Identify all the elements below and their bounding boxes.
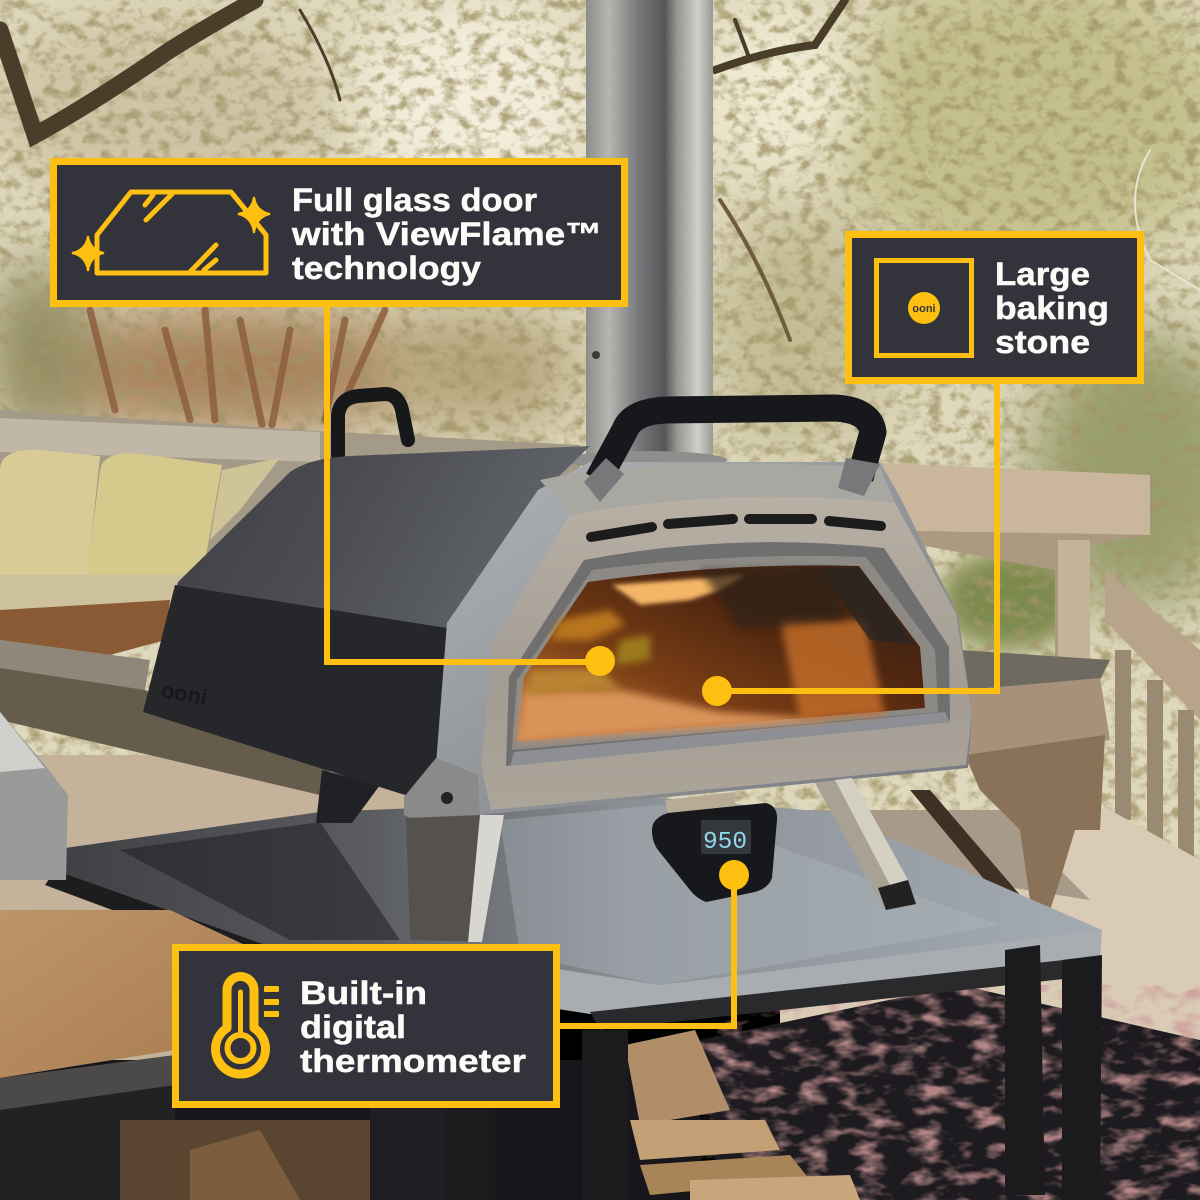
glass door <box>518 565 925 741</box>
leader line: baking stone <box>702 382 997 706</box>
oven body lower <box>143 585 447 795</box>
right leg <box>815 778 916 910</box>
text: full glass door label: with ViewFlame™ <box>291 216 602 252</box>
text: baking stone label <box>995 256 1109 360</box>
probe bracket <box>665 792 735 816</box>
patio floor <box>0 755 1200 1065</box>
bare trunks behind sofa <box>90 310 385 425</box>
rug <box>700 985 1200 1200</box>
wooden board on sofa <box>0 600 170 655</box>
icon: baking stone with ooni logo <box>876 260 972 356</box>
text: full glass door label: technology <box>292 250 481 286</box>
leader line: glass door <box>327 305 615 676</box>
panel: digital thermometer <box>176 948 556 1104</box>
deck railing <box>860 462 1200 860</box>
vents <box>591 519 881 537</box>
left side: second oven <box>0 712 68 880</box>
panel: large baking stone <box>848 234 1140 380</box>
rear handle <box>338 394 408 455</box>
panel: full glass door <box>54 162 624 304</box>
rear leg <box>316 770 380 823</box>
black table understructure <box>0 1060 700 1200</box>
pizza oven <box>143 394 972 942</box>
thermometer unit <box>652 803 777 902</box>
front cast frame <box>481 497 972 810</box>
text: thermometer label: thermometer <box>300 1043 526 1079</box>
oven body upper <box>170 446 590 640</box>
hinge <box>404 758 480 827</box>
firewood logs <box>190 1030 860 1200</box>
background: garden foliage <box>0 0 1200 880</box>
carved side table <box>0 640 1110 910</box>
icon: baking stone with ooni logo: ooni <box>912 303 936 315</box>
ooni mark on body: ooni <box>159 677 209 710</box>
leader line: thermometer <box>558 860 749 1026</box>
text: full glass door label <box>291 182 602 286</box>
sofa with cushions <box>0 410 580 655</box>
tree branches <box>0 0 1200 340</box>
icon: thermometer <box>216 977 279 1074</box>
front leg <box>406 815 504 942</box>
text: thermometer label: Built-in <box>300 975 427 1011</box>
text: full glass door label: Full glass door <box>292 182 537 218</box>
front handle <box>598 408 873 480</box>
text: thermometer label: digital <box>300 1009 406 1045</box>
digital display: 950 <box>703 829 747 856</box>
text: baking stone label: Large <box>995 256 1090 292</box>
steel table <box>45 798 1102 1030</box>
left side: wooden serving board <box>0 910 245 1110</box>
recess <box>506 542 950 766</box>
text: thermometer label <box>300 975 526 1079</box>
text: baking stone label: stone <box>995 324 1090 360</box>
table legs <box>445 945 1102 1200</box>
icon: glass door with sparkles <box>72 192 270 273</box>
chimney <box>563 0 727 469</box>
silver shell <box>434 462 972 815</box>
text: baking stone label: baking <box>995 290 1109 326</box>
